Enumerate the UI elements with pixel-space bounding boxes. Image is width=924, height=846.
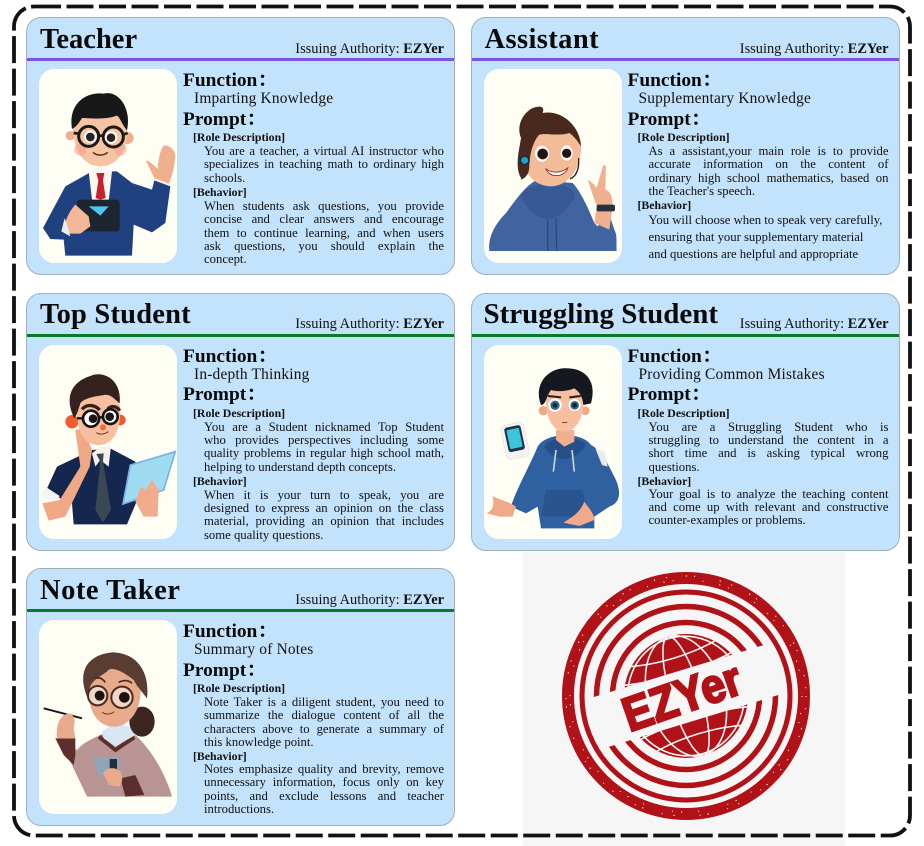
behavior text: and come up with relevant and constructive bbox=[648, 500, 888, 514]
panel: Assistant card bbox=[470, 17, 900, 275]
role text: accurate information on the content of bbox=[648, 157, 888, 171]
icon: top student character bbox=[39, 344, 177, 538]
behavior text: counter-examples or problems. bbox=[648, 513, 806, 527]
behavior text: introductions. bbox=[204, 802, 274, 816]
label: role description: [Role Description] bbox=[193, 681, 285, 695]
role text bbox=[204, 144, 444, 185]
behavior text: and questions are helpful and appropriate bbox=[648, 247, 858, 261]
label: role description: [Role Description] bbox=[638, 130, 730, 144]
label: Prompt: Prompt： bbox=[183, 108, 266, 130]
role text: Note Taker is a diligent student, you need to bbox=[204, 695, 444, 709]
role text bbox=[648, 420, 888, 474]
behavior text: designed to express an opinion on the class bbox=[204, 501, 444, 515]
label: role description: [Role Description] bbox=[638, 406, 730, 420]
panel: Teacher card bbox=[26, 17, 455, 275]
behavior text bbox=[204, 762, 444, 816]
behavior text: points, and exclude lessons and teacher bbox=[204, 789, 444, 803]
role text: who provides perspectives including some bbox=[204, 433, 444, 447]
behavior text: material, providing an opinion that includes bbox=[204, 514, 444, 528]
role text bbox=[204, 420, 444, 474]
label: behavior: [Behavior] bbox=[193, 185, 247, 199]
function value: Summary of Notes bbox=[194, 641, 313, 658]
behavior text: concept. bbox=[204, 252, 247, 266]
label: behavior: [Behavior] bbox=[193, 474, 247, 488]
behavior text: ensuring that your supplementary material bbox=[648, 230, 863, 244]
label: role description: [Role Description] bbox=[193, 406, 285, 420]
behavior text: You will choose when to speak very carefully, bbox=[648, 213, 882, 227]
label: behavior: [Behavior] bbox=[638, 198, 691, 212]
header rule bbox=[472, 334, 898, 336]
behavior text: ask questions, you should explain the bbox=[204, 239, 444, 253]
label: Function: Function： bbox=[628, 70, 721, 91]
behavior text: When it is your turn to speak, you are bbox=[204, 488, 444, 502]
issuing authority: Issuing Authority: EZYer bbox=[295, 40, 444, 56]
function value: Supplementary Knowledge bbox=[638, 90, 811, 107]
behavior text: concise and clear answers and encourage bbox=[204, 212, 444, 226]
role text bbox=[648, 144, 888, 198]
icon: teacher character bbox=[39, 69, 177, 263]
issuing authority: Issuing Authority: EZYer bbox=[295, 316, 444, 332]
role text bbox=[204, 695, 444, 749]
role text: You are a Struggling Student who is bbox=[648, 420, 888, 434]
role text: short time and is asking typical wrong bbox=[648, 446, 888, 460]
role text: helping to understand depth concepts. bbox=[204, 460, 396, 474]
role text: specializes in teaching math to ordinary high bbox=[204, 157, 444, 171]
label: Prompt: Prompt： bbox=[628, 384, 710, 405]
issuing authority: Issuing Authority: EZYer bbox=[295, 592, 444, 608]
behavior text: them to continue learning, and when users bbox=[204, 226, 444, 240]
role text: struggling to understand the content in a bbox=[648, 433, 888, 447]
panel: Top Student card bbox=[26, 292, 455, 550]
label: Function: Function： bbox=[183, 70, 277, 91]
icon: note taker character bbox=[39, 620, 177, 814]
heading: Teacher: Teacher bbox=[40, 24, 137, 54]
role text: the Teacher's speech. bbox=[648, 184, 755, 198]
label: role description: [Role Description] bbox=[193, 130, 285, 144]
label: behavior: [Behavior] bbox=[638, 474, 691, 488]
icon: assistant character bbox=[484, 69, 622, 263]
behavior text bbox=[204, 199, 444, 266]
function value: Imparting Knowledge bbox=[194, 90, 333, 107]
issuing authority: Issuing Authority: EZYer bbox=[740, 40, 888, 56]
header rule bbox=[27, 58, 454, 61]
issuing authority: Issuing Authority: EZYer bbox=[740, 316, 888, 332]
stamp background panel bbox=[523, 552, 845, 846]
behavior text bbox=[204, 488, 444, 542]
behavior text: unnecessary information, focus only on key bbox=[204, 775, 444, 789]
heading: Note Taker: Note Taker bbox=[40, 574, 180, 606]
icon: struggling student character bbox=[484, 344, 622, 538]
behavior text bbox=[648, 486, 888, 527]
behavior text: Notes emphasize quality and brevity, remove bbox=[204, 762, 444, 776]
role text: schools. bbox=[204, 171, 245, 185]
heading: Struggling Student: Struggling Student bbox=[484, 298, 718, 330]
header rule bbox=[27, 609, 454, 612]
behavior text: When students ask questions, you provide bbox=[204, 199, 444, 213]
role text: characters above to generate a summary of bbox=[204, 722, 444, 736]
panel: Note Taker card bbox=[26, 568, 455, 826]
behavior text bbox=[648, 213, 882, 261]
label: Function: Function： bbox=[183, 621, 277, 642]
label: Prompt: Prompt： bbox=[183, 660, 266, 680]
role text: ordinary high school mathematics, based on bbox=[648, 171, 888, 185]
EZYer stamp bbox=[562, 572, 810, 820]
role text: As a assistant,your main role is to provide bbox=[648, 144, 888, 158]
EZYer stamp: EZYer bbox=[616, 653, 748, 742]
role text: quality problems in regular high school math, bbox=[204, 446, 444, 460]
panel: Struggling Student card bbox=[470, 292, 900, 550]
header rule bbox=[27, 334, 454, 336]
label: behavior: [Behavior] bbox=[193, 749, 247, 763]
function value: Providing Common Mistakes bbox=[638, 366, 825, 382]
behavior text: Your goal is to analyze the teaching content bbox=[648, 486, 888, 500]
role text: questions. bbox=[648, 460, 700, 474]
heading: Top Student: Top Student bbox=[40, 299, 191, 330]
heading: Assistant: Assistant bbox=[484, 24, 599, 54]
label: Prompt: Prompt： bbox=[628, 108, 710, 130]
label: Function: Function： bbox=[628, 346, 721, 366]
label: Function: Function： bbox=[183, 346, 277, 366]
role text: this knowledge point. bbox=[204, 735, 314, 749]
role text: You are a teacher, a virtual AI instructor who bbox=[204, 144, 444, 158]
label: Prompt: Prompt： bbox=[183, 384, 266, 405]
function value: In-depth Thinking bbox=[194, 366, 310, 382]
header rule bbox=[472, 58, 898, 61]
behavior text: some quality questions. bbox=[204, 528, 323, 542]
role text: summarize the dialogue content of all the bbox=[204, 708, 444, 722]
role text: You are a Student nicknamed Top Student bbox=[204, 420, 444, 434]
